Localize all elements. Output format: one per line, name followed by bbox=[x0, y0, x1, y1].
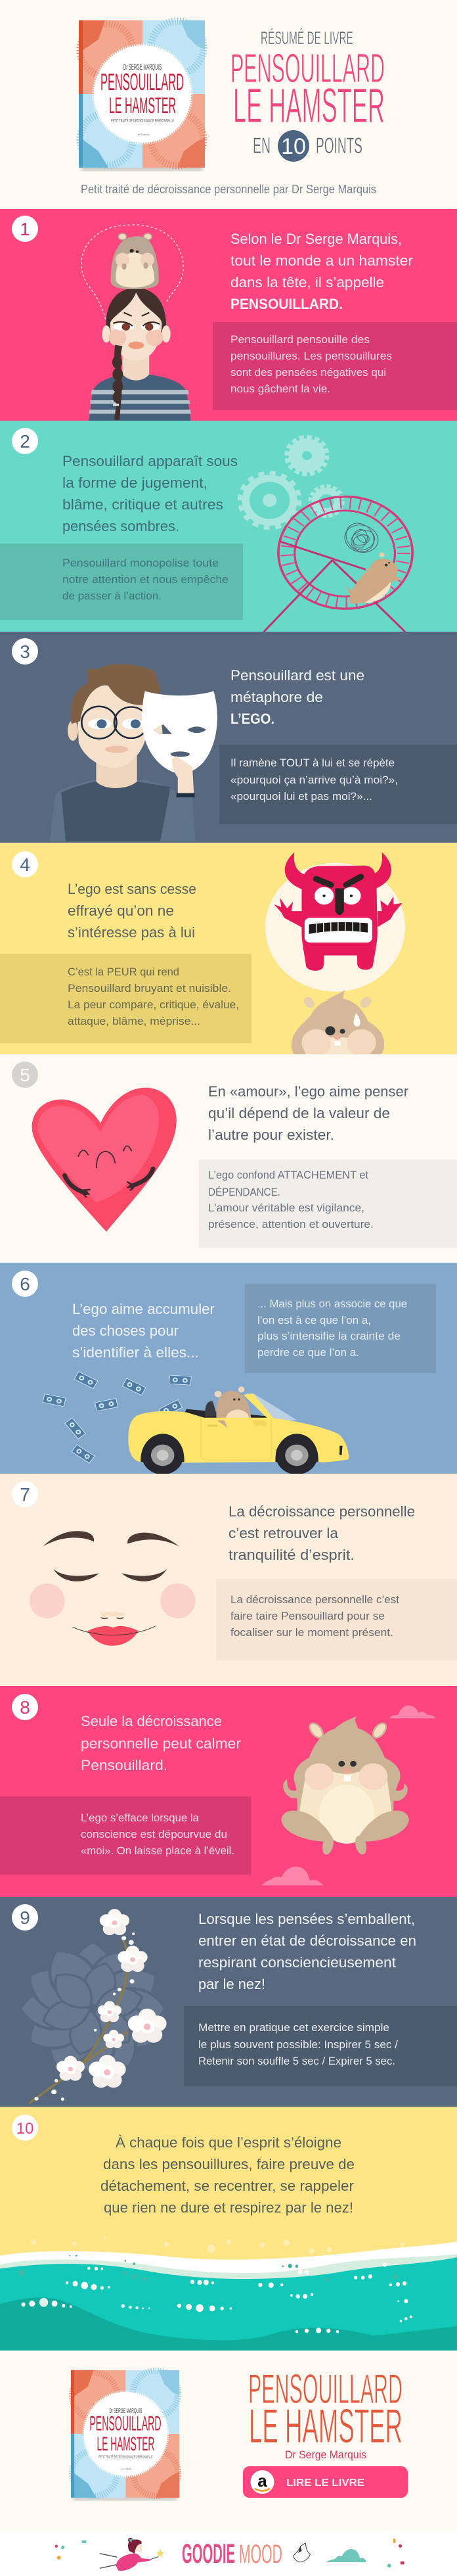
icon: amazon bbox=[251, 2470, 274, 2494]
illustration: girl with hamster on head bbox=[81, 225, 191, 421]
panel: point 6 bbox=[0, 1263, 457, 1474]
icon: cloud bbox=[326, 2549, 366, 2562]
badge 1: 1 bbox=[20, 219, 30, 239]
heading bbox=[62, 453, 238, 534]
illustration: monster in thought bubble above hamster bbox=[265, 852, 405, 1062]
callout bbox=[0, 954, 251, 1043]
callout: focaliser sur le moment présent. bbox=[230, 1626, 393, 1639]
badge 6: 6 bbox=[20, 1274, 30, 1294]
callout: attaque, blâme, méprise... bbox=[68, 1015, 200, 1027]
title: résumé de livre: RÉSUMÉ DE LIVRE bbox=[261, 28, 353, 48]
heading bbox=[230, 231, 413, 312]
illustration: flying fairy bbox=[100, 2538, 164, 2571]
heading: métaphore de bbox=[230, 689, 323, 705]
heading: Pensouillard est une bbox=[230, 667, 364, 684]
heading: effrayé qu’on ne bbox=[68, 902, 174, 919]
heading bbox=[230, 667, 364, 727]
heading: l’autre pour exister. bbox=[208, 1127, 334, 1143]
badge 1 bbox=[12, 216, 38, 242]
title: Pensouillard le hamster bbox=[230, 46, 385, 133]
confetti right bbox=[387, 2539, 404, 2568]
heading: par le nez! bbox=[198, 1976, 265, 1992]
callout: Il ramène TOUT à lui et se répète bbox=[230, 757, 395, 769]
heading: dans la tête, il s’appelle bbox=[230, 274, 384, 291]
heading: À chaque fois que l’esprit s’éloigne bbox=[116, 2134, 341, 2151]
heading: L’ego est sans cesse bbox=[68, 881, 196, 897]
heading bbox=[72, 1301, 215, 1361]
illustration: sea waves on the beach bbox=[0, 2236, 457, 2351]
callout: ... Mais plus on associe ce que bbox=[257, 1298, 407, 1310]
heading: Selon le Dr Serge Marquis, bbox=[230, 231, 402, 247]
book cover: PETIT TRAITÉ DE DÉCROISSANCE PERSONNELLE bbox=[111, 118, 174, 124]
heading: s’identifier à elles... bbox=[72, 1344, 199, 1361]
heading: Pensouillard. bbox=[81, 1757, 167, 1773]
callout: faire taire Pensouillard pour se bbox=[230, 1610, 385, 1622]
confetti left bbox=[55, 2541, 86, 2560]
button: lire le livre: LIRE LE LIVRE bbox=[286, 2477, 364, 2489]
callout: conscience est dépourvue du bbox=[81, 1828, 227, 1840]
badge 8: 8 bbox=[20, 1697, 30, 1718]
callout: Retenir son souffle 5 sec / Expirer 5 sec. bbox=[198, 2055, 395, 2067]
illustration: lotus and cherry blossom branch bbox=[18, 1909, 167, 2103]
illustration: boy holding a mask bbox=[49, 664, 217, 841]
callout: pensouillures. Les pensouillures bbox=[230, 350, 392, 362]
heading: que rien ne dure et respirez par le nez! bbox=[104, 2199, 353, 2216]
heading: En «amour», l’ego aime penser bbox=[208, 1083, 408, 1100]
callout bbox=[213, 322, 457, 410]
callout: «pourquoi ça n’arrive qu’à moi?», bbox=[230, 774, 398, 786]
title: en 10 points bbox=[253, 130, 362, 162]
book cover: LE HAMSTER bbox=[109, 93, 176, 118]
callout bbox=[216, 1579, 457, 1660]
panel: point 7 bbox=[0, 1474, 457, 1686]
logo: Goodie Mood: GOODIE bbox=[182, 2538, 235, 2569]
title: en 10 points: EN bbox=[253, 133, 271, 158]
badge 9: 9 bbox=[20, 1908, 30, 1928]
heading bbox=[198, 1911, 416, 1992]
panel: header bbox=[0, 0, 457, 209]
book cover bbox=[79, 20, 205, 171]
panel: point 3 bbox=[0, 632, 457, 843]
icon: amazon: a bbox=[257, 2471, 267, 2491]
callout: L’amour véritable est vigilance, bbox=[208, 1202, 364, 1214]
heading: PENSOUILLARD. bbox=[230, 296, 343, 312]
heading: la forme de jugement, bbox=[62, 475, 207, 491]
callout bbox=[245, 1284, 436, 1373]
title: en 10 points: POINTS bbox=[316, 133, 362, 158]
heading: tranquilité d’esprit. bbox=[229, 1547, 355, 1563]
callout: présence, attention et ouverture. bbox=[208, 1218, 374, 1230]
badge 7 bbox=[12, 1481, 38, 1507]
badge 2: 2 bbox=[20, 431, 30, 452]
callout bbox=[0, 544, 243, 620]
heading: entrer en état de décroissance en bbox=[198, 1932, 416, 1949]
badge 5: 5 bbox=[20, 1065, 30, 1085]
panel: book call to action bbox=[0, 2351, 457, 2531]
book cover: Dr SERGE MARQUIS bbox=[109, 2408, 142, 2415]
heading: personnelle peut calmer bbox=[81, 1735, 241, 1752]
callout: nous gâchent la vie. bbox=[230, 383, 330, 395]
callout bbox=[199, 1159, 457, 1248]
heading: tout le monde a un hamster bbox=[230, 252, 413, 269]
book cover: PENSOUILLARD bbox=[100, 68, 184, 95]
callout: l’on est à ce que l’on a, bbox=[257, 1314, 371, 1326]
panel: point 8 bbox=[0, 1686, 457, 1897]
heading bbox=[229, 1503, 415, 1563]
badge 10: 10 bbox=[16, 2120, 33, 2138]
badge 3 bbox=[12, 638, 38, 665]
callout bbox=[0, 1796, 251, 1875]
illustration: hamster in convertible with flying money bbox=[42, 1371, 349, 1474]
logo: Goodie Mood: MOOD bbox=[239, 2540, 282, 2569]
panel: point 10 bbox=[0, 2107, 457, 2351]
heading: c’est retrouver la bbox=[229, 1525, 339, 1541]
book cover: Les Éditions bbox=[121, 2467, 132, 2470]
illustration: calm hamster and clouds bbox=[262, 1706, 436, 1885]
panel: point 5 bbox=[0, 1054, 457, 1263]
callout: La peur compare, critique, évalue, bbox=[68, 998, 239, 1011]
callout: La décroissance personnelle c’est bbox=[230, 1593, 399, 1606]
callout: Mettre en pratique cet exercice simple bbox=[198, 2021, 389, 2034]
badge 10 bbox=[12, 2115, 38, 2141]
icon: dove bbox=[294, 2543, 311, 2562]
heading bbox=[100, 2134, 355, 2216]
heading: s’intéresse pas à lui bbox=[68, 924, 195, 941]
book cover: PETIT TRAITÉ DE DÉCROISSANCE PERSONNELLE bbox=[98, 2455, 153, 2460]
heading: Lorsque les pensées s’emballent, bbox=[198, 1911, 415, 1927]
book cover: PENSOUILLARD bbox=[89, 2412, 162, 2435]
callout bbox=[184, 2006, 457, 2086]
heading: Pensouillard apparaît sous bbox=[62, 453, 238, 469]
heading: des choses pour bbox=[72, 1323, 179, 1339]
badge 5 bbox=[12, 1062, 38, 1088]
callout: Pensouillard pensouille des bbox=[230, 333, 370, 346]
badge 6 bbox=[12, 1271, 38, 1297]
heading: blâme, critique et autres bbox=[62, 496, 223, 513]
illustration: gears and hamster wheel bbox=[240, 437, 412, 632]
badge 9 bbox=[12, 1904, 38, 1931]
heading: qu’il dépend de la valeur de bbox=[208, 1105, 390, 1121]
panel: point 4 bbox=[0, 843, 457, 1062]
subtitle: Petit traité de décroissance personnelle par Dr Serge Marquis bbox=[81, 183, 376, 196]
callout: de passer à l’action. bbox=[62, 590, 162, 602]
callout: «pourquoi lui et pas moi?»... bbox=[230, 790, 372, 803]
book author: Dr Serge Marquis bbox=[285, 2448, 366, 2461]
book cover bbox=[71, 2370, 179, 2500]
callout: le plus souvent possible: Inspirer 5 sec / bbox=[198, 2038, 398, 2051]
heading: respirant consciencieusement bbox=[198, 1954, 396, 1971]
callout: L’ego s’efface lorsque la bbox=[81, 1812, 200, 1824]
callout: notre attention et nous empêche bbox=[62, 573, 229, 586]
book cover: Les Éditions bbox=[137, 133, 150, 136]
callout: sont des pensées négatives qui bbox=[230, 366, 386, 379]
heading: L’EGO. bbox=[230, 711, 274, 727]
callout: Pensouillard monopolise toute bbox=[62, 557, 219, 569]
callout: C’est la PEUR qui rend bbox=[68, 966, 179, 978]
book cover: Dr SERGE MARQUIS bbox=[123, 62, 162, 72]
panel: point 9 bbox=[0, 1897, 457, 2107]
heading: dans les pensouillures, faire preuve de bbox=[103, 2156, 355, 2172]
badge 7: 7 bbox=[20, 1484, 30, 1505]
callout: «moi». On laisse place à l’éveil. bbox=[81, 1844, 234, 1857]
heading: L’ego aime accumuler bbox=[72, 1301, 215, 1317]
badge 8 bbox=[12, 1694, 38, 1720]
heading: Seule la décroissance bbox=[81, 1713, 222, 1729]
callout: L’ego confond ATTACHEMENT et bbox=[208, 1169, 368, 1181]
callout bbox=[219, 745, 457, 824]
badge 4 bbox=[12, 851, 38, 878]
callout: DÉPENDANCE. bbox=[208, 1186, 280, 1198]
heading bbox=[81, 1713, 241, 1773]
book cover: LE HAMSTER bbox=[97, 2433, 154, 2455]
heading: La décroissance personnelle bbox=[229, 1503, 415, 1520]
panel: Goodie Mood footer bbox=[0, 2531, 457, 2576]
button: lire le livre bbox=[243, 2466, 408, 2498]
title: en 10 points: 10 bbox=[281, 134, 306, 159]
callout: perdre ce que l’on a. bbox=[257, 1346, 359, 1359]
illustration: heart hugging itself bbox=[32, 1088, 177, 1232]
heading: pensées sombres. bbox=[62, 518, 179, 534]
heading bbox=[208, 1083, 408, 1143]
panel: point 2 bbox=[0, 421, 457, 632]
heading: détachement, se recentrer, se rappeler bbox=[100, 2178, 354, 2194]
badge 4: 4 bbox=[20, 855, 30, 875]
illustration: serene face bbox=[30, 1531, 195, 1646]
badge 2 bbox=[12, 428, 38, 454]
heading bbox=[68, 881, 196, 941]
badge 3: 3 bbox=[20, 642, 30, 662]
book title bbox=[248, 2366, 403, 2453]
callout: plus s’intensifie la crainte de bbox=[257, 1330, 401, 1342]
panel: point 1 bbox=[0, 209, 457, 421]
callout: Pensouillard bruyant et nuisible. bbox=[68, 982, 231, 995]
